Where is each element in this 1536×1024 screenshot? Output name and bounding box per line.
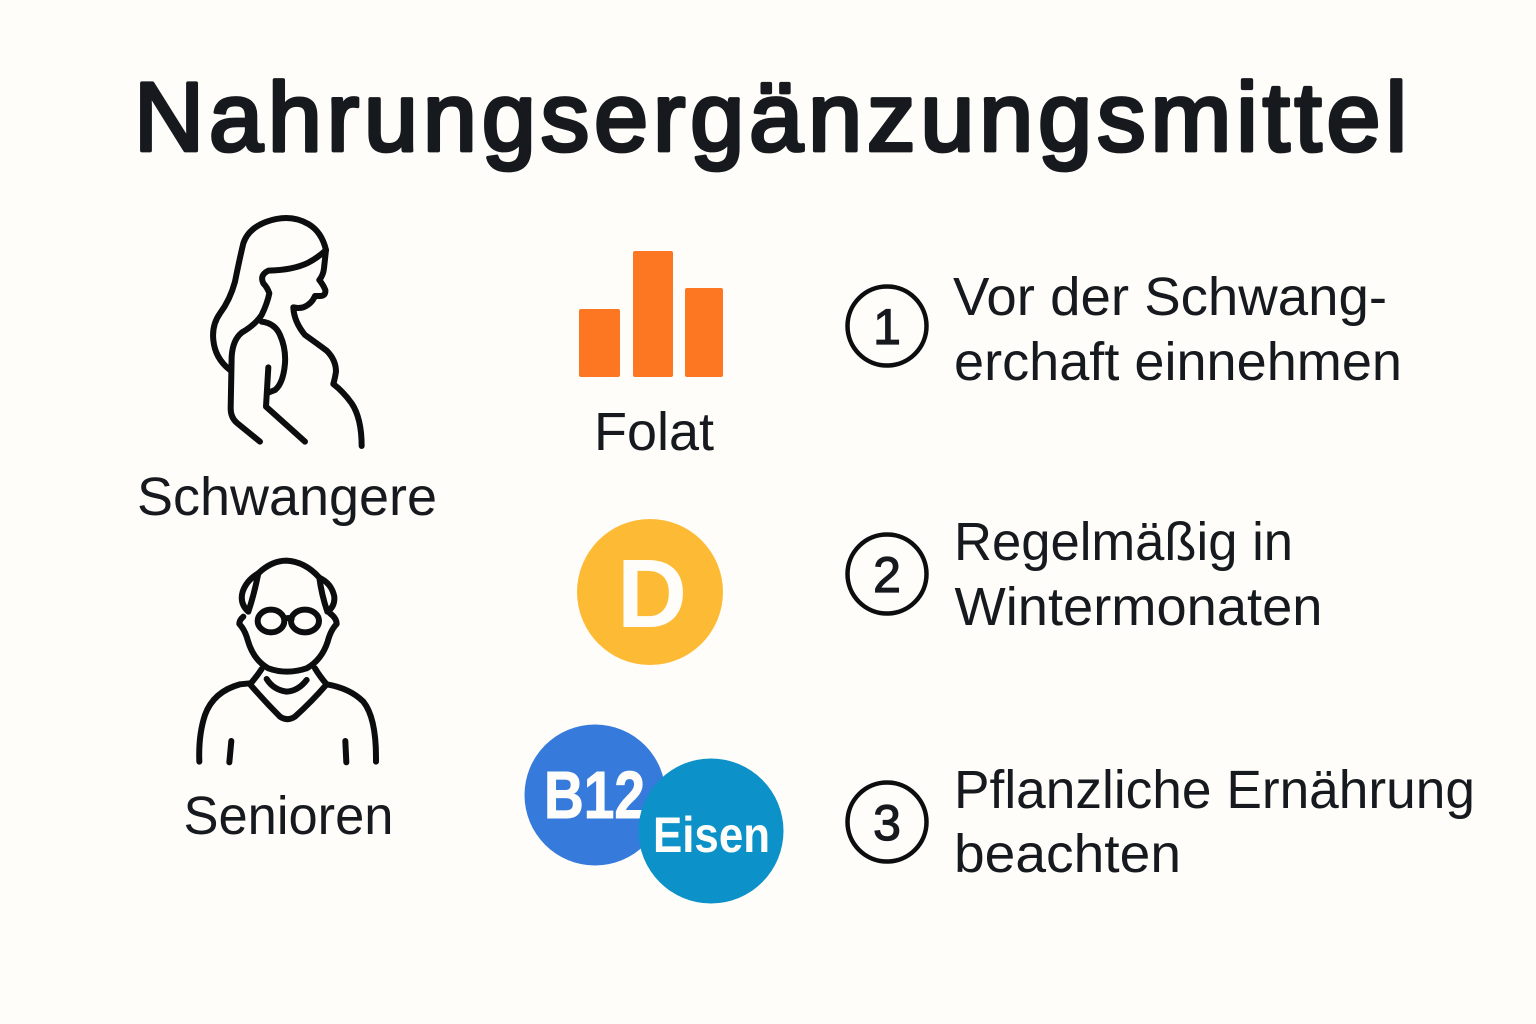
icon: folate bar chart <box>579 251 723 377</box>
icon: pregnant woman <box>213 218 362 446</box>
tip 2: 2 <box>873 547 901 603</box>
title: Nahrungsergänzungsmittel <box>134 62 1407 172</box>
tip 3: Pflanzliche Ernährung <box>954 760 1475 820</box>
icon: iron <box>638 758 784 904</box>
label: Folat: Folat <box>594 402 714 462</box>
icon: vitamin B12 <box>524 724 666 866</box>
tip 2 <box>848 512 1322 637</box>
tip 3: 3 <box>873 795 901 851</box>
icon: senior man <box>199 561 376 762</box>
label: Senioren: Senioren <box>184 786 394 846</box>
icon: iron: Eisen <box>653 807 770 863</box>
tip 3: beachten <box>954 824 1181 884</box>
panel: nutrients <box>524 251 784 904</box>
tip 1: erchaft einnehmen <box>954 332 1402 392</box>
tip 1 <box>848 267 1402 392</box>
tip 1: Vor der Schwang- <box>953 267 1387 327</box>
panel: tips <box>848 267 1475 884</box>
icon: vitamin D <box>577 519 723 665</box>
icon: vitamin B12: B12 <box>544 758 645 833</box>
tip 2: Regelmäßig in <box>954 512 1293 572</box>
tip 3 <box>848 760 1475 884</box>
tip 1: 1 <box>873 299 901 355</box>
icon: vitamin D: D <box>617 539 687 648</box>
tip 2: Wintermonaten <box>954 577 1322 637</box>
label: Schwangere: Schwangere <box>137 467 437 527</box>
panel: target groups <box>137 218 437 846</box>
